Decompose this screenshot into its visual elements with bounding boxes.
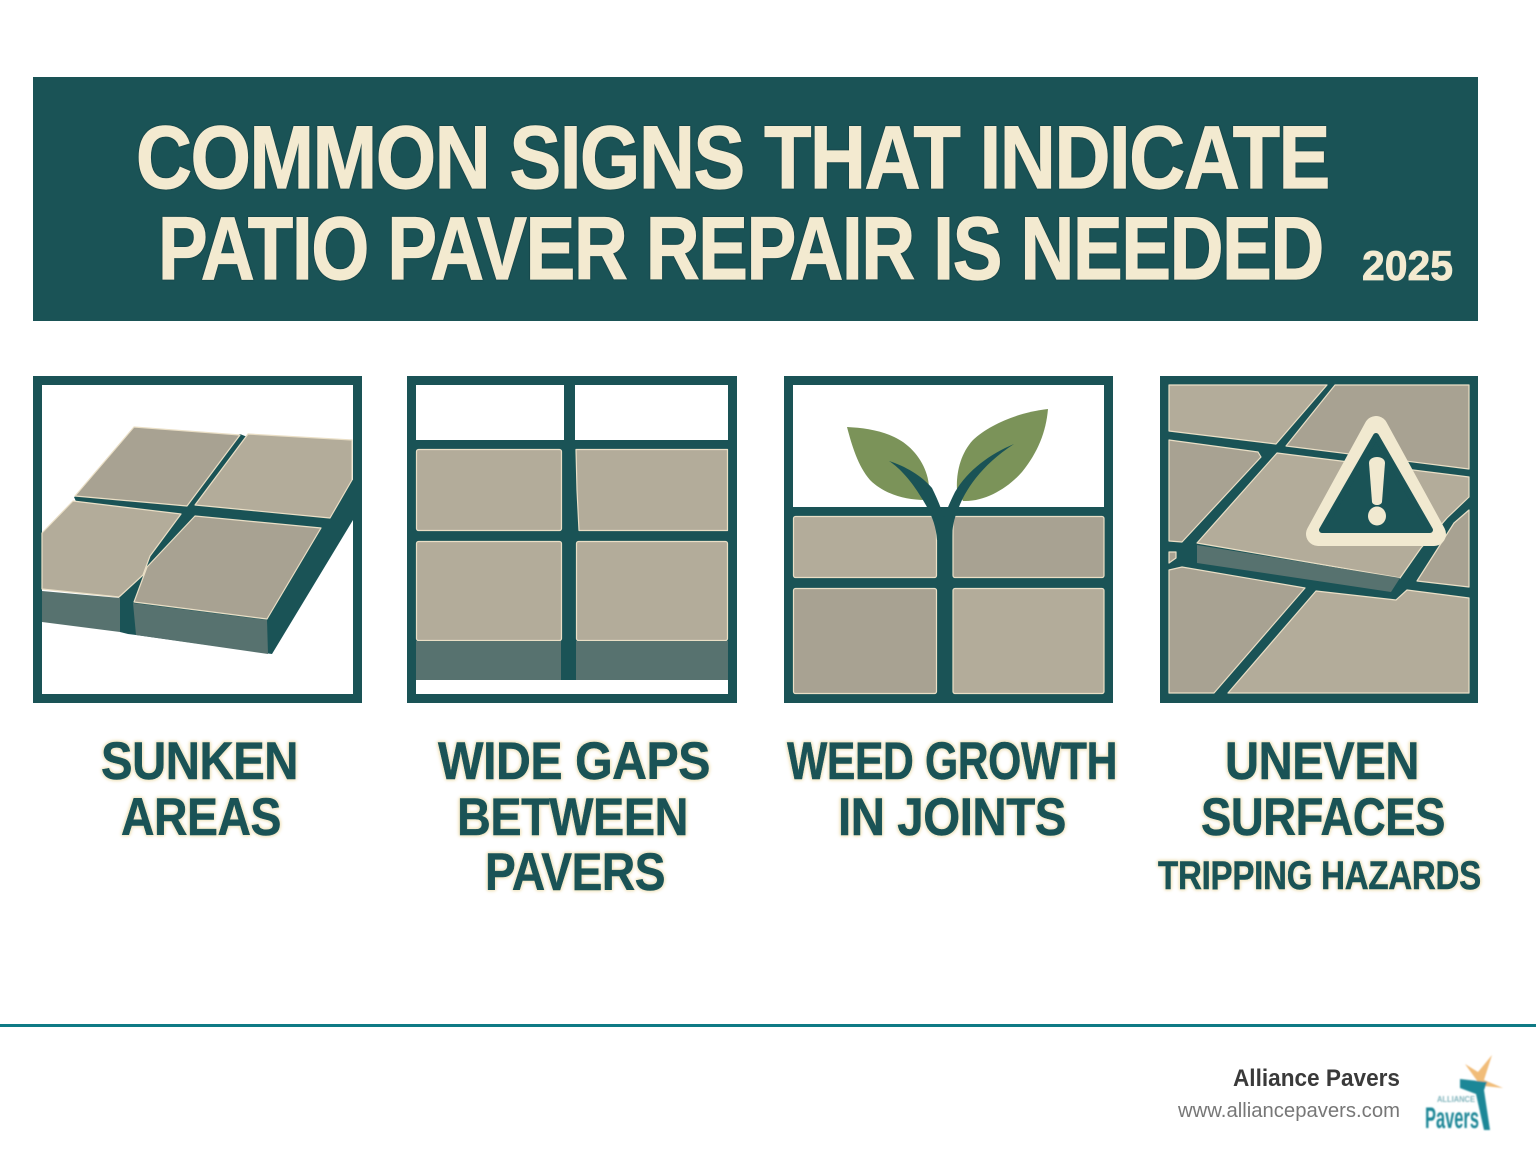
paver row 2 right [576, 542, 728, 640]
paver: bottom right [1228, 590, 1469, 693]
label: sunken areas: AREAS [121, 788, 281, 847]
paver: top left [75, 427, 240, 506]
title banner [33, 77, 1478, 321]
title line 2: PATIO PAVER REPAIR IS NEEDED [158, 198, 1323, 298]
logo [1425, 1055, 1503, 1135]
paver: bottom right, sunken [134, 516, 321, 619]
label: weed growth in joints [787, 732, 1117, 847]
label: uneven surfaces [1158, 732, 1481, 898]
paver: raised centre [1197, 453, 1469, 578]
panel: weed growth [788, 380, 1108, 698]
paver: top left [1169, 385, 1327, 444]
icon: right leaf [957, 409, 1048, 501]
paver: left middle [1169, 440, 1261, 542]
year: 2025 [1362, 242, 1453, 289]
label: uneven surfaces: UNEVEN [1225, 732, 1419, 791]
paver: bottom left [1169, 567, 1305, 693]
panel: wide gaps [412, 380, 732, 698]
footer divider [0, 1024, 1536, 1027]
paver: top right [1286, 385, 1469, 469]
paver front face [1197, 545, 1400, 592]
title line 1: COMMON SIGNS THAT INDICATE [136, 107, 1329, 207]
icon: teal florida [1460, 1079, 1490, 1130]
paver: right small [1417, 510, 1469, 587]
front face right [576, 641, 728, 680]
icon: left leaf [847, 427, 929, 500]
paver row 1 left [794, 516, 936, 578]
paver row 1 left [416, 450, 562, 530]
footer brand name: Alliance Pavers [1233, 1065, 1400, 1092]
label: sunken areas [101, 732, 298, 847]
label: wide gaps between pavers: WIDE GAPS [438, 732, 710, 791]
label: weed growth in joints: WEED GROWTH [787, 732, 1117, 791]
label: uneven surfaces: SURFACES [1201, 788, 1445, 847]
label: wide gaps between pavers [438, 732, 710, 902]
exclamation bar [1369, 457, 1385, 505]
grout [793, 507, 1104, 694]
front face left [42, 591, 120, 632]
logo text large: Pavers [1425, 1102, 1479, 1135]
icon: stem [889, 444, 1014, 540]
panel: sunken areas [38, 380, 358, 698]
icon: orange star [1465, 1055, 1503, 1088]
front face left [416, 641, 561, 680]
label: wide gaps between pavers: PAVERS [485, 843, 665, 902]
paver row 1 right [576, 450, 728, 530]
paver row 1 right [953, 516, 1104, 578]
small paver corner [1169, 552, 1176, 563]
front face right [133, 603, 268, 654]
paver: top right [195, 434, 352, 518]
logo text small: ALLIANCE [1437, 1095, 1476, 1104]
icon: warning triangle [1318, 428, 1434, 534]
paver row 2 right [953, 588, 1104, 694]
paver grout and side [74, 434, 353, 654]
paver: bottom left [42, 501, 181, 597]
label: sunken areas: SUNKEN [101, 732, 298, 791]
paver row 2 left [416, 542, 562, 640]
label: wide gaps between pavers: BETWEEN [457, 788, 688, 847]
footer url: www.alliancepavers.com [1177, 1100, 1400, 1122]
exclamation dot [1368, 506, 1386, 526]
panel: uneven surfaces [1164, 380, 1474, 698]
central grout [416, 449, 728, 680]
label: weed growth in joints: IN JOINTS [838, 788, 1066, 847]
upper grout [416, 385, 728, 449]
paver row 2 left [794, 588, 936, 694]
